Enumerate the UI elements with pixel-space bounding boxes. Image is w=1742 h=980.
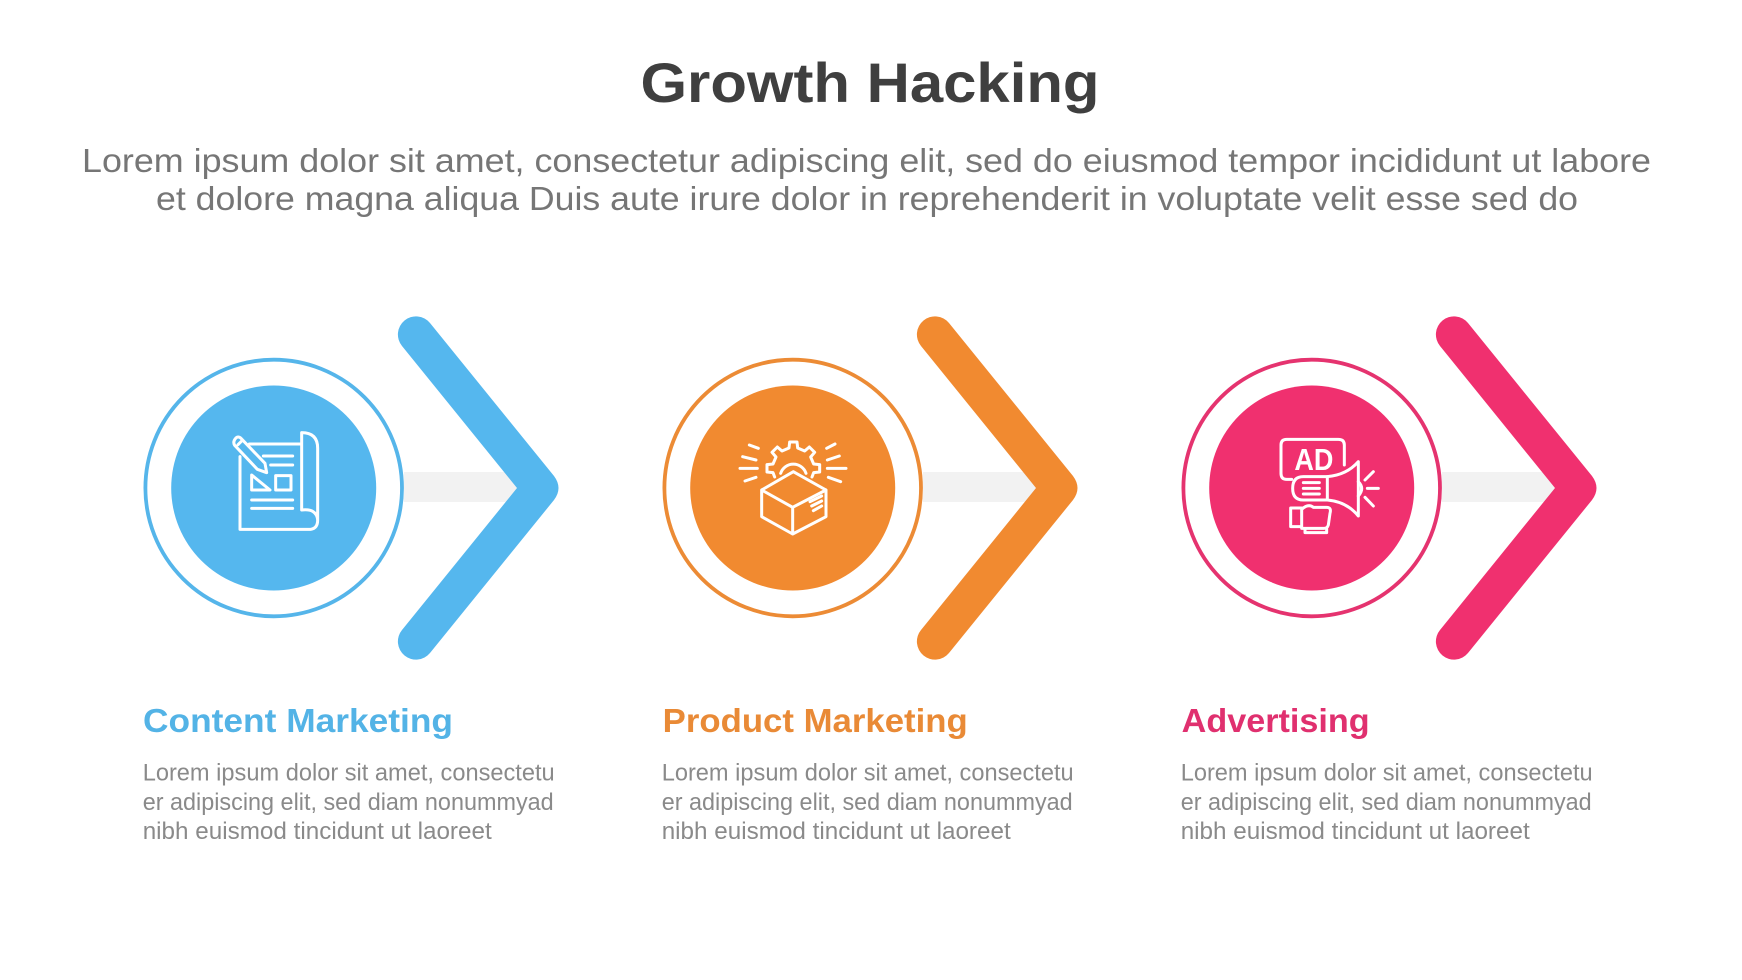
connector bar — [1442, 472, 1567, 502]
description: advertising — [1181, 760, 1593, 845]
subtitle text block — [82, 142, 1651, 217]
connector bar — [404, 472, 529, 502]
subtitle text block: et dolore magna aliqua Duis aute irure dolor in reprehenderit in voluptate velit esse sed do — [156, 180, 1578, 217]
panel: product marketing — [662, 316, 1078, 845]
heading: advertising: Advertising — [1182, 702, 1370, 739]
title: Growth Hacking — [640, 51, 1100, 114]
description: content marketing: er adipiscing elit, sed diam nonummyad — [143, 789, 554, 816]
icon: megaphone with AD sign: AD — [1294, 443, 1333, 477]
inner disc — [690, 386, 895, 590]
description: product marketing: er adipiscing elit, sed diam nonummyad — [662, 789, 1073, 816]
description: product marketing: Lorem ipsum dolor sit amet, consectetu — [662, 760, 1074, 786]
description: advertising: er adipiscing elit, sed diam nonummyad — [1181, 789, 1592, 816]
inner disc — [171, 386, 376, 590]
subtitle text block: Lorem ipsum dolor sit amet, consectetur adipiscing elit, sed do eiusmod tempor incididunt ut labore — [82, 142, 1651, 179]
description: product marketing — [662, 760, 1074, 845]
panel: content marketing — [143, 316, 558, 845]
description: product marketing: nibh euismod tincidunt ut laoreet — [662, 818, 1011, 845]
chevron arrow — [917, 316, 1078, 660]
description: content marketing: Lorem ipsum dolor sit amet, consectetu — [143, 760, 555, 786]
connector bar — [923, 472, 1048, 502]
description: advertising: Lorem ipsum dolor sit amet, consectetu — [1181, 760, 1593, 786]
outer ring — [1183, 360, 1440, 616]
panel: advertising — [1181, 316, 1596, 845]
icon: megaphone with AD sign — [1281, 439, 1378, 533]
description: content marketing — [143, 760, 555, 845]
outer ring — [664, 360, 921, 616]
chevron arrow — [1436, 316, 1596, 660]
description: content marketing: nibh euismod tincidunt ut laoreet — [143, 818, 492, 845]
chevron arrow — [398, 316, 558, 660]
outer ring — [145, 360, 402, 616]
icon: box with gear — [740, 442, 846, 534]
icon: blueprint document with pencil — [234, 433, 318, 529]
inner disc — [1209, 386, 1414, 590]
description: advertising: nibh euismod tincidunt ut laoreet — [1181, 818, 1530, 845]
heading: content marketing: Content Marketing — [143, 702, 453, 739]
heading: product marketing: Product Marketing — [663, 702, 968, 739]
